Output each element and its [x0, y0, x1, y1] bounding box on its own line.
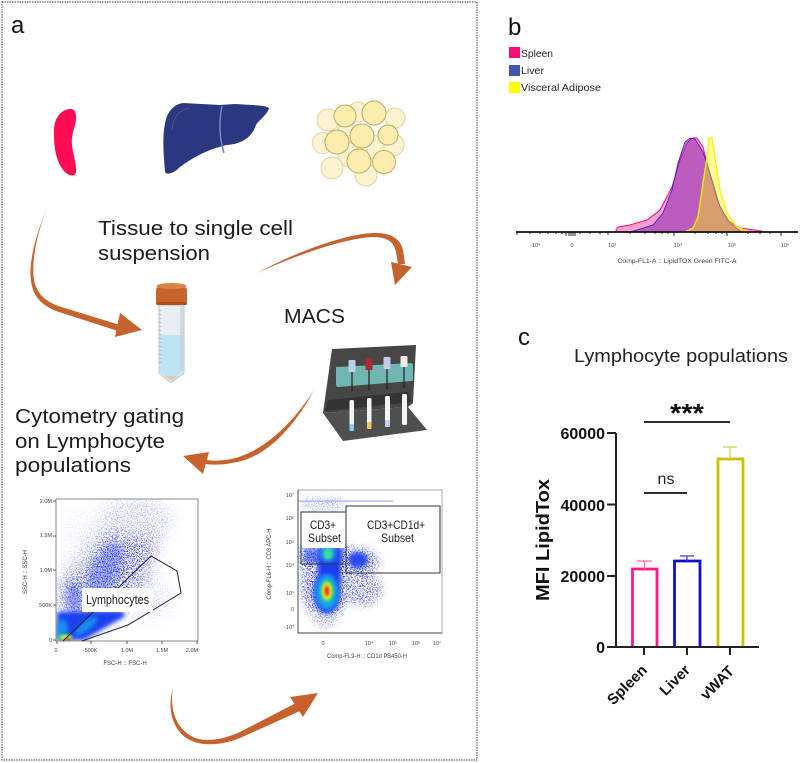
histogram curves	[616, 138, 762, 232]
panel c: bar chart	[518, 324, 788, 709]
bar: vWAT	[718, 447, 743, 647]
heading: cytometry gating: populations	[15, 454, 131, 477]
significance: ns	[644, 471, 687, 493]
scatter axes	[56, 499, 198, 641]
icon: conical tube	[156, 283, 187, 382]
panel label a: a	[11, 12, 25, 39]
histogram tick labels: 10³	[608, 243, 616, 249]
panel label b: b	[508, 14, 521, 41]
density plot frame	[298, 490, 442, 633]
tick labels: 10⁷	[286, 492, 294, 499]
arrow: gating to subset	[171, 688, 318, 744]
tick labels: 10⁶	[412, 640, 420, 647]
tick labels: 0	[54, 648, 58, 654]
legend: Spleen	[521, 48, 553, 60]
histogram tick labels	[530, 242, 789, 249]
gate: CD3+ subset: CD3+	[310, 518, 336, 532]
gate: CD3+ subset: Subset	[308, 531, 342, 545]
gate: CD3+CD1d+ subset	[346, 506, 440, 573]
tick labels: 2.0M	[40, 499, 52, 505]
chart: FSC SSC scatter plot: FSC-H :: FSC-H	[103, 661, 147, 667]
chart: FSC SSC scatter plot	[23, 499, 199, 667]
gate label: Lymphocytes	[86, 592, 149, 607]
chart: FSC SSC scatter plot: SSC-H :: SSC-H	[23, 550, 29, 594]
significance: ***: ***	[670, 398, 705, 428]
tick labels: 10⁶	[286, 515, 294, 522]
label: MACS: MACS	[284, 305, 345, 328]
heading: cytometry gating: Cytometry gating	[15, 405, 184, 428]
panel label c: c	[518, 324, 530, 351]
panel a: workflow frame	[2, 2, 477, 760]
arrow: tissues to tube	[30, 204, 142, 337]
y axis title: MFI LipidTox	[532, 478, 553, 601]
legend: Liver	[521, 65, 545, 77]
y axis: 0	[596, 640, 605, 657]
tick labels: 500K	[39, 603, 52, 609]
x labels	[604, 662, 738, 709]
tick labels: 10⁴	[286, 562, 295, 569]
chart: CD1d CD3 density plot	[267, 490, 442, 660]
tick labels: 10⁵	[389, 640, 397, 647]
tick labels: 0	[291, 607, 294, 613]
tick labels: 10⁷	[433, 640, 441, 647]
y axis: 20000	[560, 569, 605, 586]
heading: tissue to single cell suspension: suspension	[98, 242, 210, 265]
tick labels: 1.5M	[40, 533, 52, 539]
arrow: MACS to cytometry	[183, 390, 314, 474]
histogram axis	[516, 231, 798, 233]
legend: Visceral Adipose	[521, 82, 601, 94]
significance: ns: ns	[658, 471, 674, 488]
y axis: 40000	[560, 498, 605, 515]
lymphocyte gate	[63, 556, 181, 641]
chart title: Lymphocyte populations	[574, 346, 788, 366]
x labels: Spleen	[604, 662, 651, 709]
histogram tick labels: 10⁴	[674, 242, 683, 249]
gate: CD3+CD1d+ subset: CD3+CD1d+	[367, 518, 425, 532]
tick labels: 10³	[286, 591, 294, 597]
tick labels: 1.0M	[121, 648, 134, 654]
arrow: suspension to MACS	[257, 233, 412, 285]
significance: ***	[644, 398, 730, 428]
x axis	[607, 647, 759, 655]
tick labels: 1.0M	[40, 568, 52, 574]
x labels: Liver	[656, 662, 694, 699]
tick labels	[284, 492, 441, 647]
icon: adipose cells	[312, 101, 405, 186]
tick labels: 0	[321, 641, 325, 647]
legend	[509, 47, 601, 94]
heading: tissue to single cell suspension: Tissue to single cell	[98, 217, 293, 240]
histogram tick labels: 10⁶	[781, 242, 789, 249]
tick labels: -10³	[284, 625, 294, 631]
histogram axis title: Comp-FL1-A :: LipidTOX Green FITC-A	[618, 259, 736, 265]
chart: CD1d CD3 density plot: Comp-FL9-H :: CD1d PB450-H	[327, 654, 407, 660]
histogram tick labels: 10⁵	[728, 242, 736, 249]
icon: spleen	[54, 109, 76, 176]
y axis: 60000	[560, 426, 605, 443]
tick labels: 500K	[85, 648, 98, 654]
tick labels: 10⁵	[286, 539, 294, 546]
gate: CD3+CD1d+ subset: Subset	[381, 531, 415, 545]
icon: liver	[163, 103, 269, 174]
chart: CD1d CD3 density plot: Comp-FL6-H :: CD3 APC-H	[267, 528, 273, 600]
histogram tick labels: -10³	[530, 243, 540, 249]
bar: liver	[674, 556, 700, 647]
gate: CD3+ subset	[301, 512, 346, 564]
y axis	[560, 426, 616, 657]
tick labels	[39, 499, 199, 654]
x labels: vWAT	[697, 663, 738, 704]
icon: MACS magnetic rack	[323, 345, 427, 441]
bar: spleen	[632, 561, 657, 647]
tick labels: 2.0M	[186, 648, 199, 654]
heading: cytometry gating: on Lymphocyte	[15, 430, 165, 453]
gate label	[82, 588, 153, 612]
tick labels: 10⁴	[365, 640, 374, 647]
tick labels: 0	[49, 638, 52, 644]
histogram tick labels: 0	[570, 243, 574, 249]
tick labels: 1.5M	[156, 648, 169, 654]
panel b: LipidTOX histogram	[508, 14, 798, 265]
